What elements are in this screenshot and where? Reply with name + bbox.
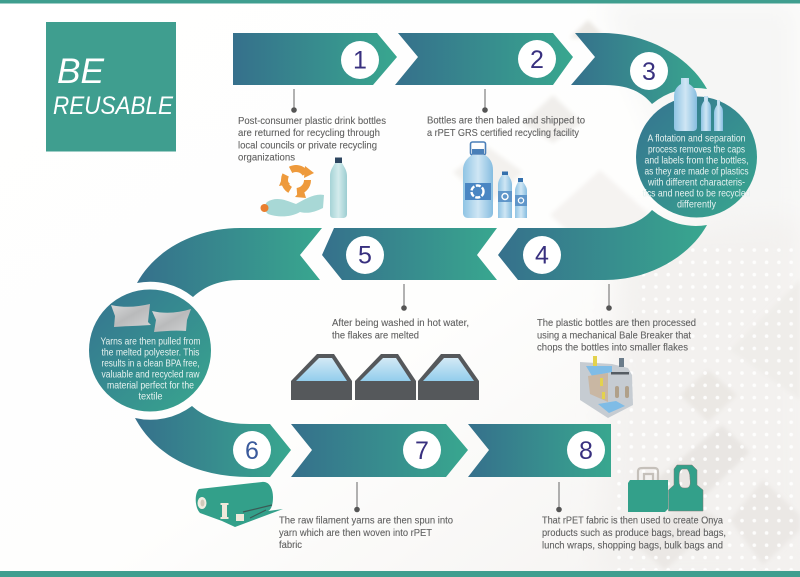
step 5 arrow — [322, 228, 497, 280]
connector 7 — [354, 482, 360, 512]
step 1 text: organizations — [238, 152, 295, 164]
tank 1 — [291, 354, 352, 400]
step 8 arrow: 8 — [579, 437, 593, 465]
icon: large water bottles with recycling labels — [463, 142, 527, 218]
connector 4 — [606, 284, 612, 311]
step 5 text: After being washed in hot water, — [332, 318, 469, 329]
step 7 arrow — [291, 424, 468, 477]
step 4 curved arrow: 4 — [535, 242, 549, 270]
step 6 text: Yarns are then pulled from — [100, 336, 200, 348]
step 1 text: are returned for recycling through — [238, 128, 380, 139]
step 2 text: Bottles are then baled and shipped to — [427, 116, 585, 126]
step 1 text: Post-consumer plastic drink bottles — [238, 116, 386, 127]
icon: reusable bags — [628, 465, 703, 512]
step 2 arrow — [395, 33, 573, 85]
step 4 curved arrow — [498, 210, 707, 280]
step 6 text: textile — [138, 392, 163, 402]
step 2 text — [427, 116, 585, 139]
icon: melting tanks — [291, 354, 479, 400]
step 6 text: material perfect for the — [107, 380, 194, 392]
step 4 text: using a mechanical Bale Breaker that — [537, 330, 691, 342]
step 5 text: the flakes are melted — [332, 330, 419, 342]
step 7 text: The raw filament yarns are then spun into — [279, 516, 453, 526]
step 6 text — [100, 336, 200, 402]
step 3 text: with different characteris- — [647, 178, 745, 188]
tank 2 — [355, 354, 416, 400]
icon: yarn sacks — [111, 304, 191, 332]
connector 1 — [291, 89, 297, 113]
step 3 circle panel — [636, 78, 757, 218]
step 1 arrow — [233, 33, 397, 85]
tank 3 — [418, 354, 479, 400]
step 3 text: tics and need to be recycled — [642, 188, 751, 200]
title — [53, 52, 173, 120]
connector 2 — [482, 89, 488, 113]
icon: fabric roll with spools and scissors — [196, 482, 283, 527]
step 3 text — [642, 134, 751, 210]
icon: recycling symbol and plastic bottles — [260, 158, 347, 218]
step 1 text: local councils or private recycling — [238, 140, 377, 152]
bottom bar — [0, 571, 800, 577]
step 7 text — [279, 516, 453, 551]
step 6 text: results in a clean BPA free, — [102, 358, 200, 370]
step 3 text: differently — [677, 200, 717, 210]
step 8 text: lunch wraps, shopping bags, bulk bags and — [542, 540, 723, 552]
step 6 curved arrow: 6 — [245, 437, 259, 465]
title: REUSABLE — [53, 92, 173, 120]
step 7 text: fabric — [279, 540, 302, 551]
title panel: Be Reusable — [46, 22, 176, 152]
step 3 curved arrow — [571, 33, 707, 104]
step 8 arrow — [468, 424, 611, 477]
step 6 circle panel — [89, 290, 211, 412]
step 4 text: chops the bottles into smaller flakes — [537, 342, 688, 354]
step 7 arrow: 7 — [415, 437, 429, 465]
step 8 text: That rPET fabric is then used to create Onya — [542, 516, 723, 526]
curved arrow between 5 and 6 — [137, 228, 322, 297]
step 3 text: A flotation and separation — [648, 134, 746, 144]
step 5 text — [332, 318, 469, 342]
step 2 text: a rPET GRS certified recycling facility — [427, 128, 580, 139]
step 4 text: The plastic bottles are then processed — [537, 318, 696, 329]
step 4 text — [537, 318, 696, 354]
top bar — [0, 0, 800, 4]
step 3 text: and labels from the bottles, — [644, 156, 748, 166]
connector 8 — [556, 482, 562, 512]
step 3 text: as they are made of plastics — [644, 166, 748, 178]
step 8 text — [542, 516, 726, 552]
step 6 text: valuable and recycled raw — [102, 370, 200, 380]
step 3 curved arrow: 3 — [642, 58, 656, 86]
step 2 arrow: 2 — [530, 46, 544, 74]
step 6 text: the melted polyester. This — [102, 348, 200, 358]
step 1 arrow: 1 — [353, 46, 367, 74]
title: BE — [57, 52, 105, 91]
icon: bale breaker machine — [580, 356, 633, 418]
icon: clear bottles — [674, 78, 723, 131]
step 6 curved arrow — [135, 406, 291, 477]
step 5 arrow: 5 — [358, 242, 372, 270]
step 3 text: process removes the caps — [648, 144, 745, 156]
step 7 text: yarn which are then woven into rPET — [279, 528, 433, 539]
connector 5 — [401, 284, 407, 311]
step 1 text — [238, 116, 386, 164]
step 8 text: products such as produce bags, bread bags, — [542, 528, 726, 539]
